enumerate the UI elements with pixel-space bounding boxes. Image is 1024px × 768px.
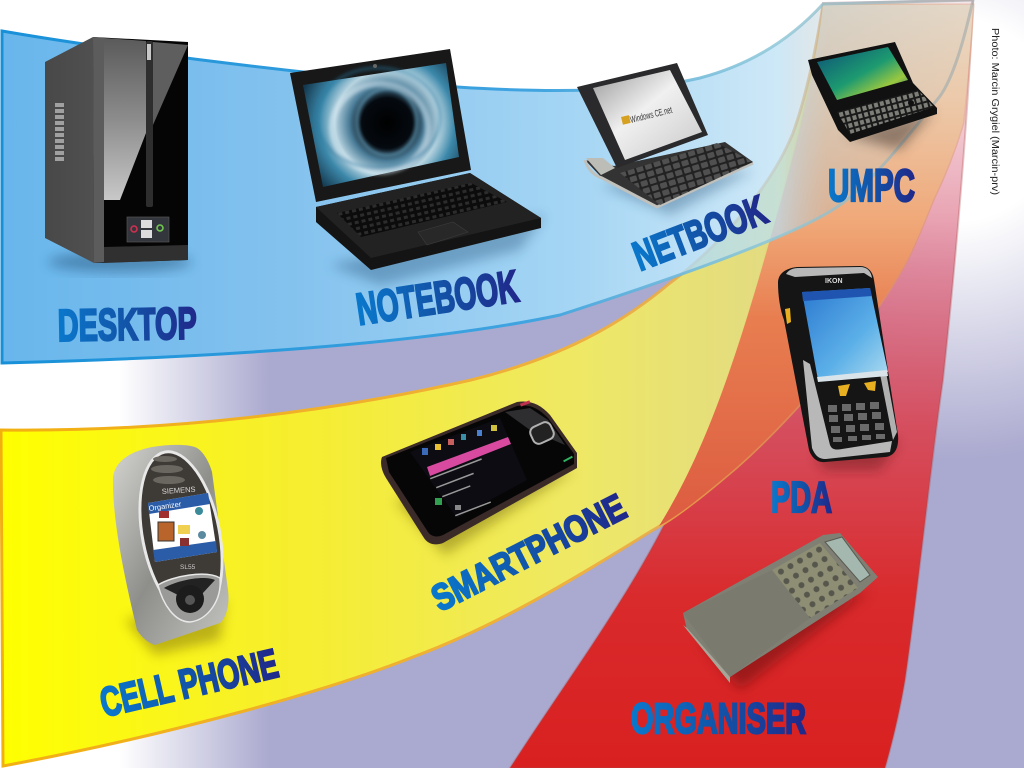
device: desktop tower (45, 37, 192, 272)
device: umpc (808, 42, 937, 150)
pda brand: IKON (825, 278, 842, 285)
label: umpc: UMPC (828, 160, 915, 211)
panel: yellow and red overlap (659, 5, 973, 526)
phone screen heading: Organizer (148, 499, 182, 513)
phone model: SL55 (180, 564, 196, 571)
panel: organiser band (510, 0, 973, 768)
label: desktop: DESKTOP (57, 298, 197, 351)
label: pda: PDA (771, 473, 832, 522)
netbook screen text: Windows CE.net (629, 105, 674, 126)
device: organiser (683, 533, 878, 690)
label: smartphone: SMARTPHONE (425, 486, 633, 619)
device: netbook (577, 63, 755, 215)
photo credit: Photo: Marcin Grygiel (Marcin-prv) (989, 28, 1001, 195)
label: cell phone: CELL PHONE (96, 640, 282, 726)
label: notebook: NOTEBOOK (353, 260, 522, 335)
label: netbook: NETBOOK (627, 187, 773, 279)
device: notebook (290, 49, 545, 285)
panel: computer band (2, 0, 973, 363)
device: smartphone (381, 400, 577, 555)
label: organiser: ORGANISER (631, 695, 806, 743)
device: pda (778, 266, 900, 470)
phone brand: SIEMENS (162, 485, 196, 496)
device: cell phone (113, 443, 237, 655)
